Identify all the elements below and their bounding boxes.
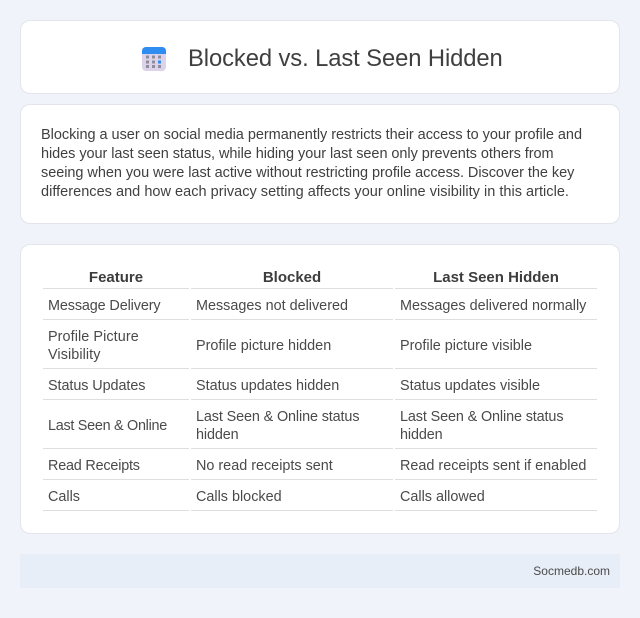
- intro text: Blocking a user on social media permanently restricts their access to your profile and: [41, 127, 582, 143]
- comparison table: Read receipts sent if enabled: [400, 458, 586, 474]
- table card: [20, 244, 620, 534]
- comparison table: Visibility: [48, 347, 101, 363]
- footer bar: [20, 554, 620, 588]
- comparison table: Calls allowed: [400, 489, 485, 505]
- comparison table: Last Seen & Online status: [196, 409, 359, 425]
- intro text: hides your last seen status, while hiding your last seen only prevents others from: [41, 146, 554, 162]
- comparison table: Status updates hidden: [196, 378, 339, 394]
- comparison table: Last Seen & Online status: [400, 409, 563, 425]
- comparison table: Message Delivery: [48, 298, 160, 314]
- comparison table: Profile picture hidden: [196, 338, 331, 354]
- comparison table: Profile picture visible: [400, 338, 532, 354]
- comparison table: Messages delivered normally: [400, 298, 586, 314]
- title card: [20, 20, 620, 94]
- comparison table: Calls: [48, 489, 80, 505]
- icon: calendar: [142, 47, 166, 71]
- comparison table: Status Updates: [48, 378, 145, 394]
- footer credit: Socmedb.com: [533, 564, 610, 578]
- comparison table: Read Receipts: [48, 458, 140, 474]
- comparison table: Blocked: [263, 269, 321, 286]
- comparison table: [43, 269, 597, 511]
- title: Blocked vs. Last Seen Hidden: [188, 45, 503, 72]
- comparison table: hidden: [196, 427, 238, 443]
- comparison table: No read receipts sent: [196, 458, 333, 474]
- intro card: [20, 104, 620, 224]
- comparison table: Profile Picture: [48, 329, 139, 345]
- intro text: differences and how each privacy setting affects your online visibility in this article.: [41, 184, 569, 200]
- comparison table: Feature: [89, 269, 143, 286]
- comparison table: Last Seen & Online: [48, 418, 167, 434]
- comparison table: Calls blocked: [196, 489, 282, 505]
- comparison table: Last Seen Hidden: [433, 269, 559, 286]
- comparison table: Messages not delivered: [196, 298, 348, 314]
- comparison table: Status updates visible: [400, 378, 540, 394]
- intro text: seeing when you were last active without restricting profile access. Discover the key: [41, 165, 574, 181]
- intro text: [41, 127, 582, 200]
- comparison table: hidden: [400, 427, 442, 443]
